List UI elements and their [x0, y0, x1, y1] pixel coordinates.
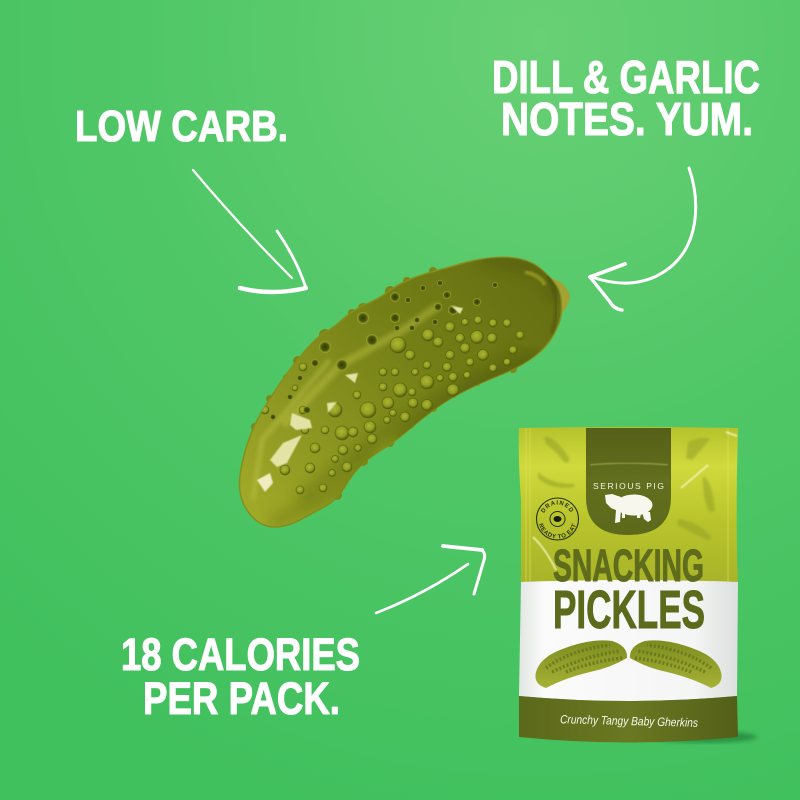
pack gloss streaks	[533, 432, 737, 570]
heading: calories per pack	[121, 629, 360, 724]
arrow: calories to pack	[376, 546, 485, 613]
wet highlights	[257, 306, 463, 492]
heading: calories per pack: PER PACK.	[143, 673, 340, 724]
icon: pig	[605, 494, 652, 523]
pack pickles title: PICKLES	[553, 580, 705, 640]
pickle stem end	[548, 278, 570, 314]
pack band shine	[590, 463, 668, 465]
pack decorative gherkin shapes	[538, 436, 715, 540]
badge: drained ready to eat	[536, 498, 580, 540]
pack brand name: SERIOUS PIG	[593, 481, 664, 491]
heading: low carb: LOW CARB.	[75, 102, 288, 151]
arrow: low carb to pickle	[193, 170, 306, 292]
pickle edge bumps	[251, 267, 517, 500]
pickle photo illustration	[239, 257, 570, 527]
heading: dill and garlic notes: NOTES. YUM.	[501, 93, 753, 145]
pack tagline: Crunchy Tangy Baby Gherkins	[560, 712, 698, 730]
pitted bumps	[270, 280, 498, 420]
heading: calories per pack: 18 CALORIES	[121, 629, 360, 680]
pack snacking title: SNACKING	[553, 540, 704, 591]
pack top yellow panel	[519, 427, 738, 584]
pack brand band	[586, 428, 671, 535]
arrow: dill and garlic to pickle	[590, 168, 696, 310]
pack shadow	[653, 731, 757, 743]
pack right gherkin	[630, 640, 722, 688]
raised bumps	[261, 316, 524, 494]
pickle body	[239, 257, 562, 527]
pack seal highlight	[526, 428, 728, 584]
badge: drained ready to eat: DRAINED	[540, 500, 574, 513]
pack bottom band	[519, 696, 738, 742]
product pack	[518, 427, 758, 744]
pack white panel	[519, 580, 738, 701]
pack left gherkin	[535, 640, 627, 688]
badge: drained ready to eat: READY TO EAT	[538, 523, 576, 538]
heading: dill and garlic notes	[492, 51, 760, 145]
pickle shading and bumps	[253, 258, 558, 525]
